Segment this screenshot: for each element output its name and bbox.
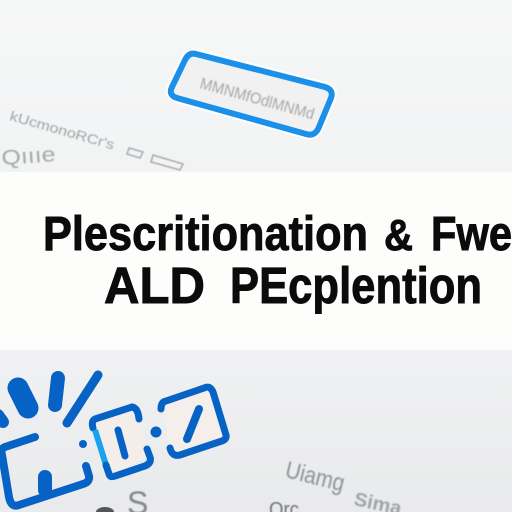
panel: top background — [0, 0, 512, 172]
icon: right square — [161, 387, 226, 455]
icon: dot — [79, 440, 87, 448]
callout label: MMNMfOdlMNMd — [198, 75, 316, 123]
title line 1: first word: Plescritionation — [43, 208, 368, 261]
icon: large open bracket box — [1, 437, 89, 506]
icon: middle square — [92, 407, 150, 477]
icon: dark blob at bottom — [96, 507, 114, 512]
title line 2: first word: ALD — [104, 257, 205, 314]
callout: blue outlined box — [171, 54, 332, 135]
icon: small rectangle marks — [127, 148, 183, 170]
text block: top left caption line 2: Qıııe — [1, 143, 56, 170]
text block: top left caption line 1: kUcmonoRCr's — [8, 108, 116, 153]
icon: dot — [150, 426, 162, 438]
title line 1: ampersand: & — [384, 211, 413, 260]
panel: title band — [0, 172, 512, 350]
panel: bottom background — [0, 350, 512, 512]
icon: blue burst rays — [0, 375, 98, 423]
title — [43, 208, 512, 314]
text block: bottom right caption line 1: Uiamg — [283, 457, 347, 497]
